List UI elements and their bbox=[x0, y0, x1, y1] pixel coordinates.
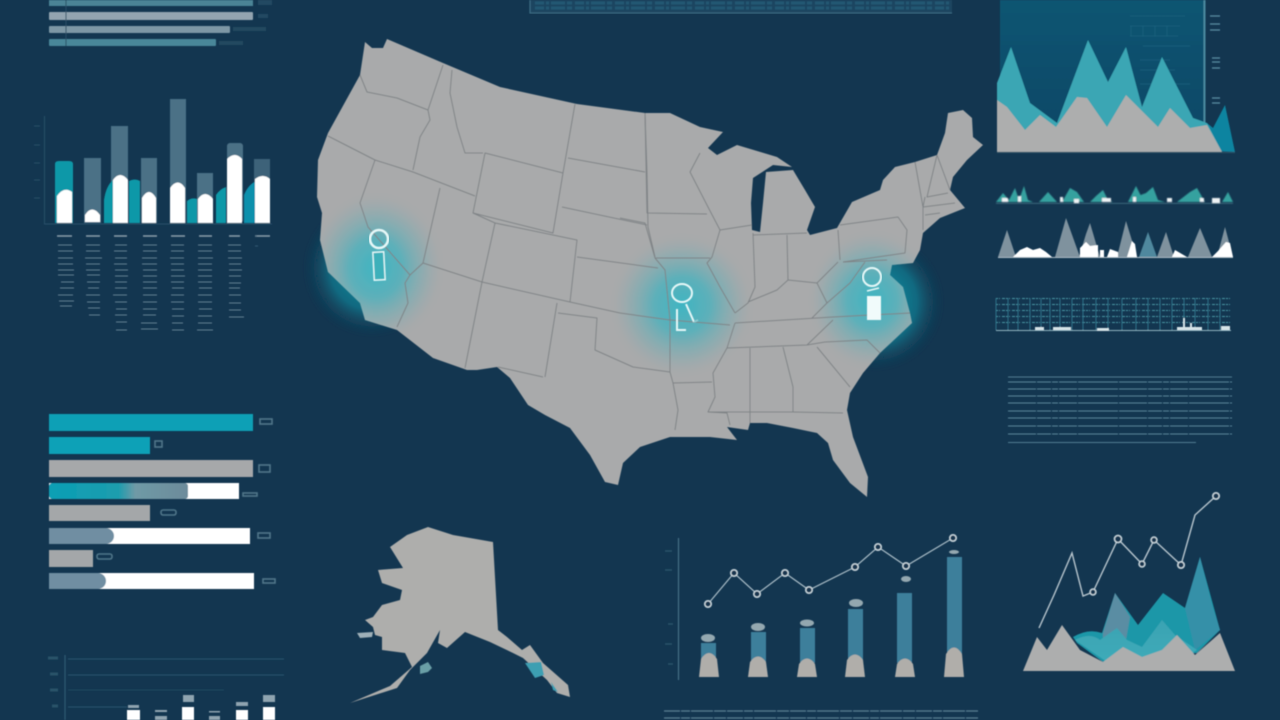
panel edge bbox=[1204, 0, 1206, 125]
teal area bbox=[997, 40, 1222, 152]
white bars bbox=[57, 155, 270, 223]
land mass bbox=[317, 39, 983, 497]
caption lines bbox=[664, 711, 978, 718]
pin: California bbox=[370, 230, 388, 280]
hotspot glows on land bbox=[323, 204, 912, 366]
bar 1 bbox=[49, 414, 253, 431]
panel grid bbox=[1130, 16, 1190, 84]
top-left horizontal bars bbox=[49, 0, 272, 46]
combo chart bottom centre bbox=[664, 535, 978, 718]
Kodiak island bbox=[420, 662, 432, 674]
horizontal bar list bbox=[49, 414, 275, 589]
gray area bbox=[1023, 625, 1235, 671]
line and area chart bottom right bbox=[1023, 493, 1235, 671]
sparkline: teal peaks bbox=[996, 186, 1233, 204]
gray area bbox=[997, 95, 1222, 152]
bottom-left column chart bbox=[48, 655, 284, 720]
area chart top right bbox=[997, 0, 1235, 152]
map inset: Alaska bbox=[350, 527, 570, 703]
map: contiguous United States bbox=[306, 39, 983, 497]
dark teal tail bbox=[1195, 105, 1235, 152]
muted peak bbox=[1103, 593, 1130, 650]
dense data table strip bbox=[996, 298, 1231, 331]
sparkline: gray peaks with white bbox=[998, 218, 1233, 258]
Aleutian island bbox=[357, 632, 373, 638]
bar 4 bbox=[49, 483, 239, 499]
bar value chips bbox=[97, 419, 275, 583]
bar 3 bbox=[49, 460, 253, 477]
column labels bbox=[57, 236, 270, 330]
trend line bbox=[1039, 496, 1216, 628]
state borders bbox=[328, 65, 955, 430]
bars bbox=[699, 550, 964, 677]
trend line bbox=[708, 538, 953, 604]
grouped bar chart top-left bbox=[34, 99, 272, 330]
ocean glows bbox=[302, 198, 945, 372]
pin: Missouri bbox=[672, 284, 698, 330]
dark panel bbox=[1000, 0, 1205, 150]
back bars bbox=[84, 99, 270, 223]
top centre strip bbox=[530, 0, 952, 13]
chart axis bbox=[34, 116, 44, 224]
bar 5 bbox=[49, 505, 150, 521]
bar 7 bbox=[49, 550, 93, 567]
panhandle highlight bbox=[525, 662, 544, 678]
mid teal area bbox=[1075, 620, 1197, 664]
axis bbox=[678, 538, 680, 680]
text block lines bbox=[1008, 377, 1232, 442]
bar 6 bbox=[49, 528, 250, 544]
pin: Virginia bbox=[863, 268, 881, 320]
side ticks bbox=[1210, 16, 1220, 103]
bar 2 bbox=[49, 437, 150, 454]
teal bars bbox=[55, 161, 256, 223]
bar 8 bbox=[49, 573, 254, 589]
back teal area bbox=[1073, 557, 1220, 662]
